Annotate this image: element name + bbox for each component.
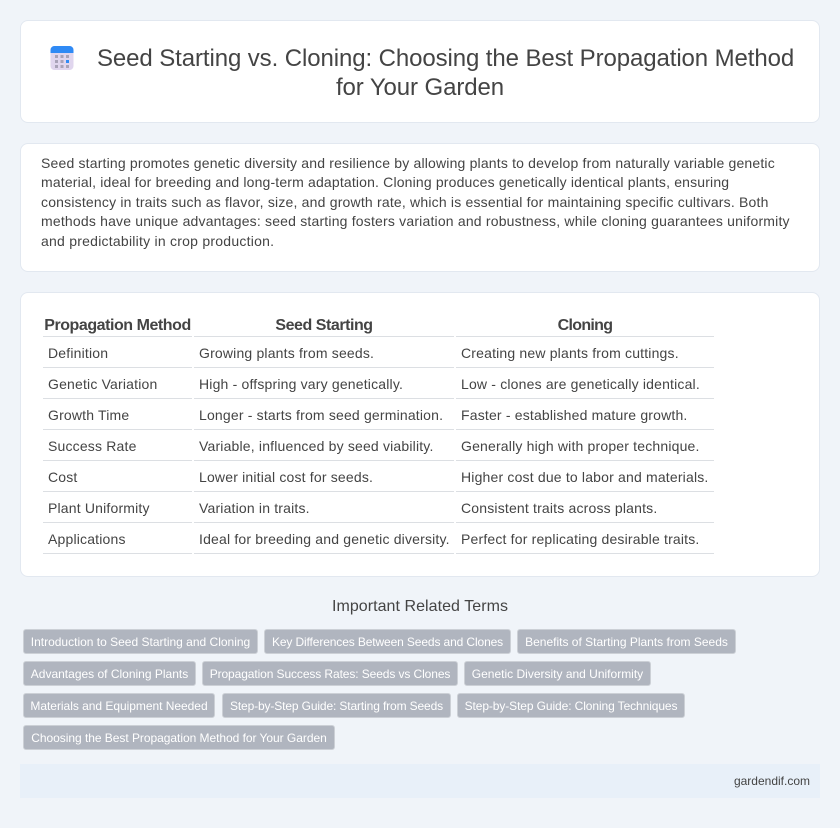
tag: [222, 693, 451, 718]
cost: seed starting: Lower initial cost for seeds.: [199, 469, 373, 485]
row: definition: Definition: [48, 345, 108, 361]
tag: Materials and Equipment Needed: [30, 699, 208, 713]
panel: comparison table: [20, 292, 820, 577]
title: Seed Starting vs. Cloning: Choosing the Best Propagation Method: [97, 45, 794, 72]
panel: description: [20, 143, 820, 272]
description text: and predictability in crop production.: [41, 232, 274, 248]
tag: Key Differences Between Seeds and Clones: [272, 635, 503, 649]
tag: [202, 661, 458, 686]
genetic variation: cloning: Low - clones are genetically identical.: [461, 376, 700, 392]
tag: Propagation Success Rates: Seeds vs Clones: [210, 667, 450, 681]
description text: material, ideal for breeding and long-term adaptation. Cloning produces genetically identical plants, ensuring: [41, 174, 729, 190]
tag: [517, 629, 736, 654]
description text: [41, 154, 790, 249]
description text: methods have unique advantages: seed starting fosters variation and robustness, while cloning guarantees uniformity: [41, 213, 790, 229]
row: cost: Cost: [48, 469, 78, 485]
tag: Genetic Diversity and Uniformity: [472, 667, 643, 681]
row: plant uniformity: Plant Uniformity: [48, 500, 150, 516]
growth time: cloning: Faster - established mature growth.: [461, 407, 688, 423]
row: growth time: Growth Time: [48, 407, 129, 423]
table header: propagation method: Propagation Method: [44, 317, 191, 334]
tag: Step-by-Step Guide: Cloning Techniques: [465, 699, 677, 713]
description text: consistency in traits such as flavor, size, and growth rate, which is essential for maintaining specific cultivars. Both: [41, 194, 769, 210]
applications: cloning: Perfect for replicating desirable traits.: [461, 531, 699, 547]
plant uniformity: cloning: Consistent traits across plants.: [461, 500, 657, 516]
footer bar: [20, 764, 820, 798]
tag: [23, 661, 196, 686]
icon: calendar: [50, 46, 74, 70]
tag: [23, 629, 258, 654]
description text: Seed starting promotes genetic diversity and resilience by allowing plants to develop from naturally variable genetic: [41, 154, 775, 170]
related terms heading: Important Related Terms: [332, 598, 508, 615]
tag: [457, 693, 685, 718]
tag: Step-by-Step Guide: Starting from Seeds: [230, 699, 443, 713]
success rate: cloning: Generally high with proper technique.: [461, 438, 700, 454]
tag: Introduction to Seed Starting and Cloning: [31, 635, 250, 649]
tag: Advantages of Cloning Plants: [31, 667, 188, 681]
definition: seed starting: Growing plants from seeds.: [199, 345, 374, 361]
tag group: related terms: [23, 629, 736, 750]
row: applications: Applications: [48, 531, 126, 547]
title: [97, 45, 794, 101]
row: genetic variation: Genetic Variation: [48, 376, 157, 392]
success rate: seed starting: Variable, influenced by seed viability.: [199, 438, 434, 454]
cost: cloning: Higher cost due to labor and materials.: [461, 469, 708, 485]
table header: cloning: Cloning: [558, 317, 612, 334]
row: success rate: Success Rate: [48, 438, 137, 454]
tag: [464, 661, 651, 686]
definition: cloning: Creating new plants from cuttings.: [461, 345, 679, 361]
title: for Your Garden: [336, 74, 504, 101]
table header: seed starting: Seed Starting: [275, 317, 373, 334]
header panel: [20, 20, 820, 123]
genetic variation: seed starting: High - offspring vary genetically.: [199, 376, 403, 392]
plant uniformity: seed starting: Variation in traits.: [199, 500, 310, 516]
tag: [23, 725, 335, 750]
applications: seed starting: Ideal for breeding and genetic diversity.: [199, 531, 450, 547]
growth time: seed starting: Longer - starts from seed germination.: [199, 407, 443, 423]
tag: Benefits of Starting Plants from Seeds: [525, 635, 728, 649]
tag: Choosing the Best Propagation Method for Your Garden: [31, 731, 327, 745]
footer source text: gardendif.com: [734, 774, 810, 788]
tag: [23, 693, 215, 718]
tag: [264, 629, 511, 654]
